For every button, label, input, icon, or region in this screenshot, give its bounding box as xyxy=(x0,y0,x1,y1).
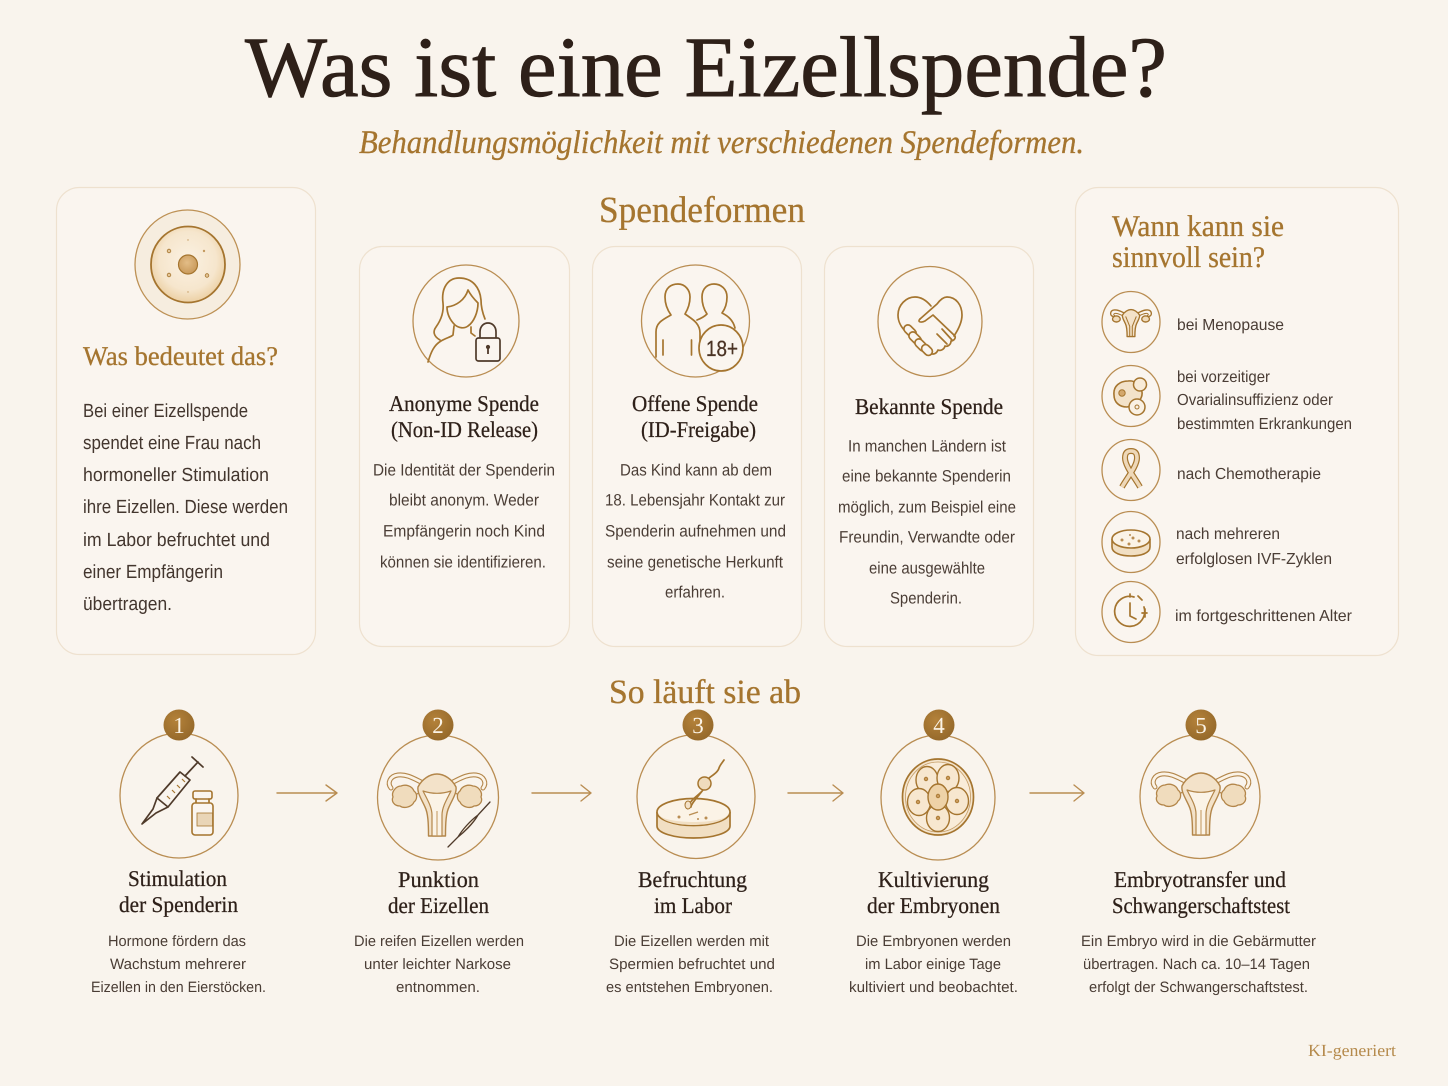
step text: Eizellen in den Eierstöcken. xyxy=(91,979,266,996)
step text: erfolgt der Schwangerschaftstest. xyxy=(1089,979,1308,996)
label: vorzeitige Ovarialinsuffizienz: bei vorzeitiger xyxy=(1177,369,1271,386)
step 4: Kultivierung xyxy=(849,710,1018,996)
step number 5 xyxy=(1186,710,1216,740)
step text: Die Embryonen werden xyxy=(856,933,1011,950)
label: nach mehreren erfolglosen IVF-Zyklen: erfolglosen IVF-Zyklen xyxy=(1176,551,1332,568)
card title: Offene Spende xyxy=(632,391,758,416)
step 1: Stimulation xyxy=(91,710,266,996)
panel: Bekannte Spende xyxy=(824,246,1034,646)
card text: können sie identifizieren. xyxy=(380,554,546,572)
card title xyxy=(632,391,758,442)
label: bei Menopause: bei Menopause xyxy=(1177,317,1284,334)
step number 2: 2 xyxy=(432,713,444,738)
step title: der Embryonen xyxy=(867,893,1000,918)
card title: Anonyme Spende xyxy=(389,391,539,416)
step number 3: 3 xyxy=(692,713,704,738)
icon: ribbon xyxy=(1102,440,1160,500)
icon: cells, ovarian insufficiency xyxy=(1102,366,1160,426)
heading: Wann kann sie sinnvoll sein? xyxy=(1112,210,1284,274)
card text: 18. Lebensjahr Kontakt zur xyxy=(605,492,785,510)
label: vorzeitige Ovarialinsuffizienz: bestimmten Erkrankungen xyxy=(1177,416,1352,433)
step text: unter leichter Narkose xyxy=(364,956,511,973)
step number 4: 4 xyxy=(933,713,945,738)
icon: woman with padlock xyxy=(413,265,519,377)
icon: uterus, menopause xyxy=(1102,292,1160,352)
icon: clock xyxy=(1102,582,1160,642)
step title: im Labor xyxy=(654,893,732,918)
card text: erfahren. xyxy=(665,584,725,602)
card text xyxy=(373,462,555,572)
step 5: Embryotransfer xyxy=(1081,710,1316,996)
text block: explanation: spendet eine Frau nach xyxy=(83,433,261,454)
panel: Was bedeutet das? xyxy=(56,188,316,654)
step text: es entstehen Embryonen. xyxy=(606,979,773,996)
icon: egg cell xyxy=(135,210,240,319)
step title: Befruchtung xyxy=(638,867,747,892)
icon: two people with 18+ badge: 18+ xyxy=(706,336,738,361)
card text xyxy=(605,462,786,602)
label: vorzeitige Ovarialinsuffizienz: Ovarialinsuffizienz oder xyxy=(1177,392,1334,409)
card title xyxy=(389,391,539,442)
step text xyxy=(1081,933,1316,996)
text block: explanation xyxy=(83,401,288,615)
icon: petri dish xyxy=(1102,512,1160,572)
step title: Kultivierung xyxy=(878,867,989,892)
icon: two people with 18+ badge xyxy=(642,265,750,377)
icon: embryo cells xyxy=(881,735,995,860)
step title: Embryotransfer und xyxy=(1114,867,1286,892)
step 3: Befruchtung xyxy=(606,710,775,996)
card text: Spenderin aufnehmen und xyxy=(605,522,786,540)
step text: Ein Embryo wird in die Gebärmutter xyxy=(1081,933,1316,950)
title: Was ist eine Eizellspende? xyxy=(245,19,1167,115)
step text xyxy=(354,933,524,996)
arrow xyxy=(277,785,337,801)
step title: Stimulation xyxy=(128,866,227,891)
arrow xyxy=(788,785,843,801)
icon: uterus xyxy=(1140,734,1260,858)
step text: Die Eizellen werden mit xyxy=(614,933,770,950)
heading: Wann kann sie sinnvoll sein?: sinnvoll sein? xyxy=(1112,241,1265,274)
label: nach Chemotherapie: nach Chemotherapie xyxy=(1177,466,1321,483)
panel: Offene Spende xyxy=(592,246,802,646)
card text: Spenderin. xyxy=(890,590,962,608)
step text xyxy=(849,933,1018,996)
card title: (Non-ID Release) xyxy=(391,417,538,442)
step text: Spermien befruchtet und xyxy=(609,956,775,973)
step title xyxy=(1112,867,1291,918)
label: nach mehreren erfolglosen IVF-Zyklen xyxy=(1176,526,1332,568)
step text: Die reifen Eizellen werden xyxy=(354,933,524,950)
text block: explanation: im Labor befruchtet und xyxy=(83,530,270,551)
card title: Bekannte Spende xyxy=(855,394,1003,419)
text block: explanation: einer Empfängerin xyxy=(83,562,223,583)
card text: In manchen Ländern ist xyxy=(848,438,1006,456)
step number 5: 5 xyxy=(1195,713,1207,738)
panel: Wann kann sie sinnvoll sein? xyxy=(1076,188,1398,656)
icon: uterus with needle xyxy=(378,735,498,860)
heading: Wann kann sie sinnvoll sein?: Wann kann sie xyxy=(1112,210,1284,243)
heading: Was bedeutet das?: Was bedeutet das? xyxy=(83,341,278,371)
step title: der Spenderin xyxy=(119,892,238,917)
step title xyxy=(638,867,747,918)
card text: Empfängerin noch Kind xyxy=(383,522,545,540)
card text xyxy=(838,438,1016,608)
step text xyxy=(91,933,266,996)
card text: Freundin, Verwandte oder xyxy=(839,528,1015,546)
step number 1 xyxy=(164,710,194,740)
step number 4 xyxy=(924,710,954,740)
card text: bleibt anonym. Weder xyxy=(389,492,539,510)
label: vorzeitige Ovarialinsuffizienz xyxy=(1177,369,1352,433)
card text: möglich, zum Beispiel eine xyxy=(838,498,1016,516)
card title: (ID-Freigabe) xyxy=(641,417,756,442)
step 2: Punktion xyxy=(354,710,524,996)
arrow xyxy=(1030,785,1084,801)
step title xyxy=(119,866,238,917)
label: im fortgeschrittenen Alter: im fortgeschrittenen Alter xyxy=(1175,608,1353,625)
step number 3 xyxy=(682,710,714,740)
step title xyxy=(388,867,489,918)
card text: Die Identität der Spenderin xyxy=(373,462,555,480)
step text: entnommen. xyxy=(396,979,480,996)
step text: kultiviert und beobachtet. xyxy=(849,979,1018,996)
card text: seine genetische Herkunft xyxy=(607,554,783,572)
step text xyxy=(606,933,775,996)
heading: Spendeformen: Spendeformen xyxy=(599,190,805,231)
card text: eine bekannte Spenderin xyxy=(842,468,1011,486)
step title: Punktion xyxy=(398,867,479,892)
heading: So läuft sie ab: So läuft sie ab xyxy=(609,674,801,711)
icon: handshake heart xyxy=(878,266,982,376)
step text: übertragen. Nach ca. 10–14 Tagen xyxy=(1083,956,1310,973)
card text: Das Kind kann ab dem xyxy=(620,462,772,480)
panel: Anonyme Spende xyxy=(360,246,570,646)
card text: eine ausgewählte xyxy=(869,560,985,578)
step text: im Labor einige Tage xyxy=(865,956,1001,973)
step text: Hormone fördern das xyxy=(108,933,246,950)
text block: explanation: Bei einer Eizellspende xyxy=(83,401,248,422)
text block: explanation: ihre Eizellen. Diese werden xyxy=(83,497,288,518)
icon: petri dish with sperm and egg xyxy=(637,734,755,858)
arrow xyxy=(532,785,591,801)
step title: der Eizellen xyxy=(388,893,489,918)
step text: Wachstum mehrerer xyxy=(110,956,246,973)
step title xyxy=(867,867,1000,918)
text block: explanation: hormoneller Stimulation xyxy=(83,465,269,486)
text block: explanation: übertragen. xyxy=(83,594,172,615)
footer note: KI-generiert: KI-generiert xyxy=(1308,1041,1396,1060)
step number 2 xyxy=(422,710,454,740)
label: nach mehreren erfolglosen IVF-Zyklen: nach mehreren xyxy=(1176,526,1280,543)
icon: syringe and vial xyxy=(120,733,238,858)
subtitle: Behandlungsmöglichkeit mit verschiedenen Spendeformen. xyxy=(359,125,1084,161)
step title: Schwangerschaftstest xyxy=(1112,893,1291,918)
step number 1: 1 xyxy=(173,713,185,738)
